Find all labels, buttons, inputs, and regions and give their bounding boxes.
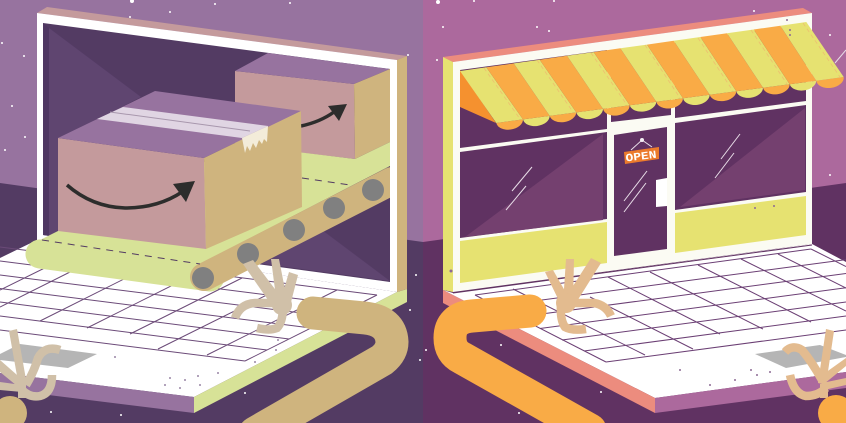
arm: tan sleeve [255,313,392,423]
screen interior [43,23,390,282]
small box [235,53,390,159]
laptop base [0,240,407,413]
awning stripes [460,22,844,123]
upper storefront panels [460,24,806,148]
arm: lower right [818,395,846,423]
left window [460,132,607,238]
arrow: large box [67,181,195,208]
yellow wall panels [460,196,806,283]
conveyor belt side [40,178,392,277]
hand: lower right [785,329,846,398]
large box [58,91,302,249]
panel: physical store laptop [423,0,846,423]
arrow: small box [301,104,347,126]
laptop frame right edge [390,60,397,292]
conveyor belt top [40,142,390,264]
conveyor rollers [192,179,384,289]
packing tape [97,107,268,153]
awning scallops [496,77,844,130]
specks: dark on base [114,339,279,389]
right window [675,105,806,210]
laptop base [443,244,846,413]
storefront frame [453,13,812,292]
awning side [460,70,496,123]
touchpad [755,345,846,368]
laptop screen frame [37,13,397,292]
specks: right panel [425,0,831,414]
arm: lower left [0,396,27,423]
laptop lid edges [443,8,812,292]
keyboard grid [0,247,377,361]
hand: lower left [0,329,60,398]
specks: dark on base and awning [450,19,791,386]
specks: left panel [1,0,421,416]
door handle [656,178,667,207]
laptop lid edges [37,7,407,292]
open sign [624,138,659,165]
arm: orange sleeve [450,311,590,423]
keyboard grid [475,249,846,362]
glare beyond awning [835,50,846,63]
open sign: OPEN [625,150,657,165]
panel: online shopping laptop [0,0,423,423]
hand: cursor on laptop [235,259,298,330]
door [614,127,667,256]
hand: cursor on store [545,258,611,330]
touchpad [0,344,97,368]
